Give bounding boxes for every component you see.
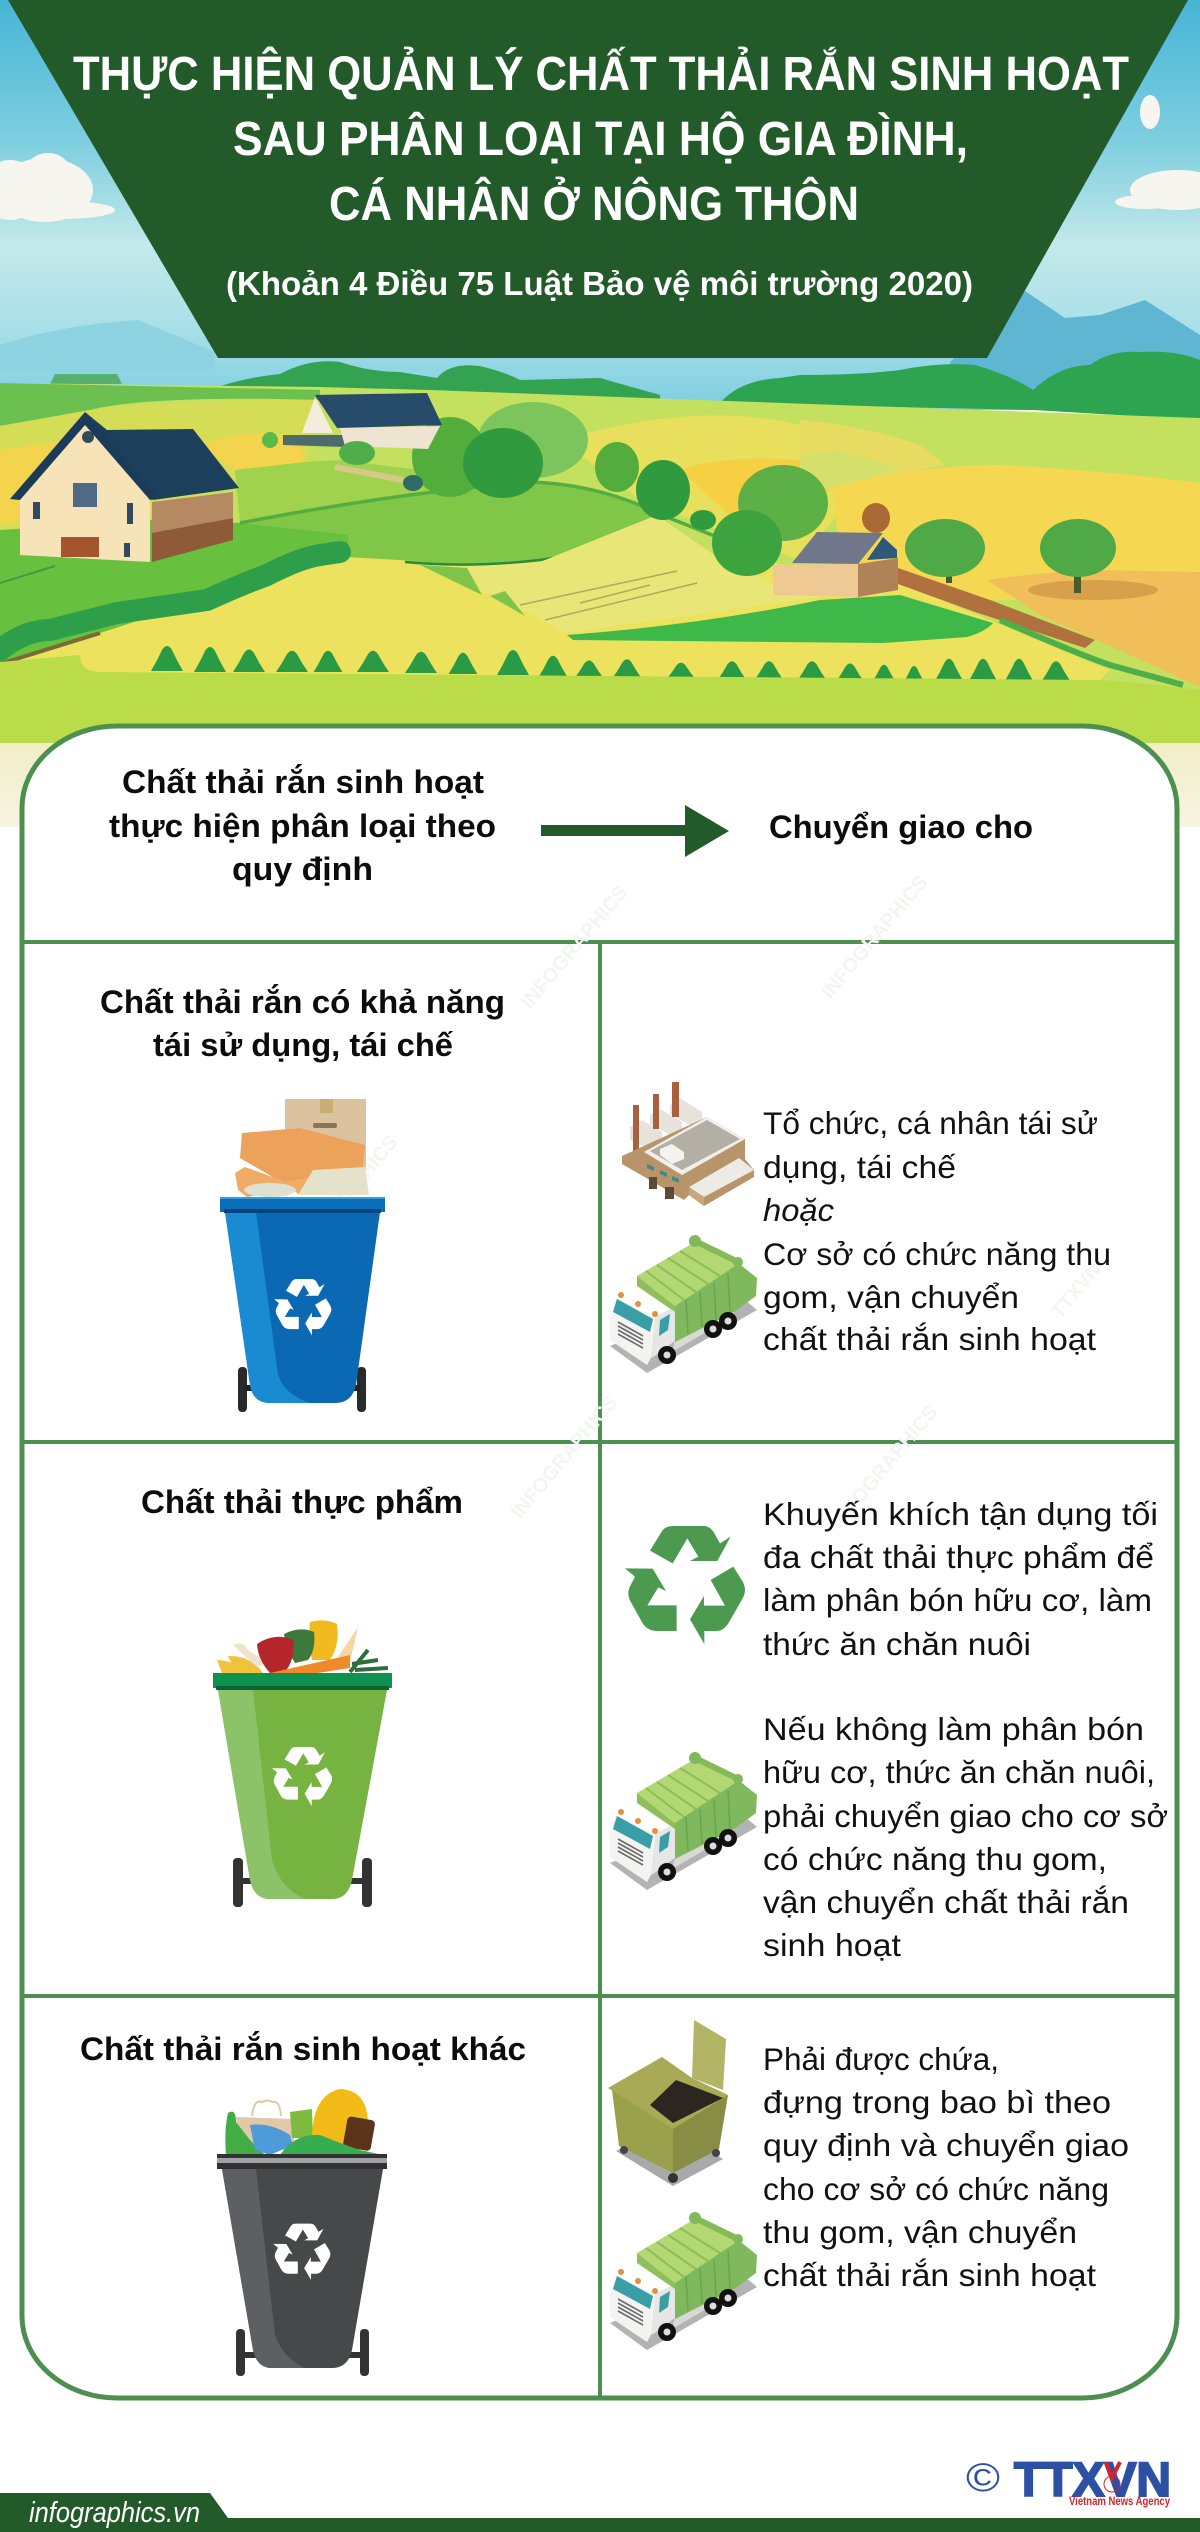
foreground strip: [0, 655, 1200, 743]
middle green hill: [240, 482, 657, 564]
text: otherwise transfer: sinh hoạt: [763, 1927, 901, 1963]
table header: left heading: thực hiện phân loại theo: [109, 808, 496, 844]
text: packaging instruction: đựng trong bao bì theo: [763, 2084, 1111, 2120]
text: packaging instruction: Phải được chứa,: [763, 2041, 999, 2077]
logo: TTXVN: Vietnam News Agency: [1069, 2494, 1170, 2508]
text: packaging instruction: [763, 2041, 1129, 2293]
faint watermarks: INFOGRAPHICS: [827, 1402, 942, 1533]
icon: green bin with food waste: [213, 1620, 392, 1907]
faint watermarks: INFOGRAPHICS: [517, 882, 632, 1013]
table header: left heading: [109, 764, 496, 887]
icon: dark bin with mixed waste: [217, 2089, 387, 2376]
row 1 heading: tái sử dụng, tái chế: [153, 1027, 453, 1063]
clouds: [0, 95, 1200, 222]
beige strip behind card: [0, 743, 1200, 827]
arrow: [541, 805, 729, 857]
faint watermarks: INFOGRAPHICS: [287, 1132, 402, 1263]
mountains: [950, 291, 1200, 400]
row 2 recipients: [610, 1496, 1168, 1963]
row 2 heading: Chất thải thực phẩm: [141, 1484, 463, 1520]
text: recipients: [763, 1105, 1111, 1357]
text: otherwise transfer: phải chuyển giao cho cơ sở: [763, 1798, 1168, 1834]
text: otherwise transfer: Nếu không làm phân bón: [763, 1711, 1144, 1747]
centre pale field: [467, 515, 820, 633]
text: encourage reuse: làm phân bón hữu cơ, làm: [763, 1582, 1152, 1618]
faint watermarks: TTXVN: [1047, 1259, 1106, 1323]
logo: TTXVN: TTXVN: [1014, 2454, 1171, 2507]
text: otherwise transfer: [763, 1711, 1168, 1963]
text: packaging instruction: cho cơ sở có chức năng: [763, 2171, 1109, 2207]
title: CÁ NHÂN Ở NÔNG THÔN: [329, 176, 859, 231]
row 1 recipients: [610, 1082, 1111, 1373]
landscape illustration: [0, 0, 1200, 743]
text: packaging instruction: quy định và chuyển giao: [763, 2127, 1129, 2163]
logo: TTXVN: ©: [966, 2456, 1000, 2500]
row 3 heading: Chất thải rắn sinh hoạt khác: [80, 2031, 526, 2067]
title: [73, 46, 1129, 231]
icon: blue bin with cardboard: [220, 1099, 385, 1412]
row 1 heading: Chất thải rắn có khả năng: [100, 984, 505, 1020]
brown path and verge: [898, 568, 1095, 648]
row 1 heading: [100, 984, 505, 1063]
faint watermarks: INFOGRAPHICS: [817, 872, 932, 1003]
footer bar: [0, 2493, 1200, 2532]
faint watermarks: INFOGRAPHICS: [507, 1392, 622, 1523]
text: recipients: dụng, tái chế: [763, 1149, 957, 1185]
text: recipients: Tổ chức, cá nhân tái sử: [763, 1105, 1098, 1141]
text: recipients: hoặc: [763, 1192, 834, 1228]
footer bar: infographics.vn: [29, 2497, 200, 2529]
icon: garbage truck: [610, 1752, 757, 1890]
main table card: [22, 726, 1177, 2398]
text: packaging instruction: chất thải rắn sinh hoạt: [763, 2257, 1096, 2293]
back fields: [0, 383, 1200, 700]
right green field: [567, 595, 993, 643]
hedge: [0, 552, 340, 650]
title: SAU PHÂN LOẠI TẠI HỘ GIA ĐÌNH,: [233, 111, 968, 166]
text: otherwise transfer: vận chuyển chất thải rắn: [763, 1884, 1129, 1920]
row of small trees: [151, 646, 1070, 681]
header panel: [8, 0, 1188, 358]
table header: left heading: quy định: [232, 851, 373, 887]
text: recipients: Cơ sở có chức năng thu: [763, 1236, 1111, 1272]
icon: green recycle symbol: [625, 1526, 745, 1644]
text: recipients: gom, vận chuyển: [763, 1279, 1019, 1315]
text: encourage reuse: đa chất thải thực phẩm để: [763, 1539, 1154, 1575]
text: recipients: chất thải rắn sinh hoạt: [763, 1321, 1096, 1357]
lower yellow field: [0, 555, 1110, 680]
text: encourage reuse: thức ăn chăn nuôi: [763, 1626, 1031, 1662]
icon: garbage truck: [610, 2212, 757, 2350]
icon: garbage truck: [610, 1235, 757, 1373]
icon: dumpster: [608, 2020, 728, 2186]
text: encourage reuse: [763, 1496, 1158, 1662]
faint watermarks: [287, 872, 1106, 1533]
table header: right heading: Chuyển giao cho: [769, 809, 1033, 845]
text: otherwise transfer: hữu cơ, thức ăn chăn nuôi,: [763, 1754, 1155, 1790]
back house: [262, 393, 442, 491]
trees: [412, 402, 1116, 593]
subtitle: (Khoản 4 Điều 75 Luật Bảo vệ môi trường 2020): [226, 265, 973, 302]
table header: left heading: Chất thải rắn sinh hoạt: [122, 764, 484, 800]
text: encourage reuse: Khuyến khích tận dụng tối: [763, 1496, 1158, 1532]
left house: [10, 412, 239, 562]
text: packaging instruction: thu gom, vận chuyển: [763, 2214, 1077, 2250]
row 3 recipients: [608, 2020, 1129, 2350]
right house: [773, 503, 898, 597]
icon: factory: [622, 1082, 754, 1206]
text: otherwise transfer: có chức năng thu gom,: [763, 1841, 1107, 1877]
green meadow under left house: [0, 520, 350, 664]
back treelines: [50, 374, 122, 384]
